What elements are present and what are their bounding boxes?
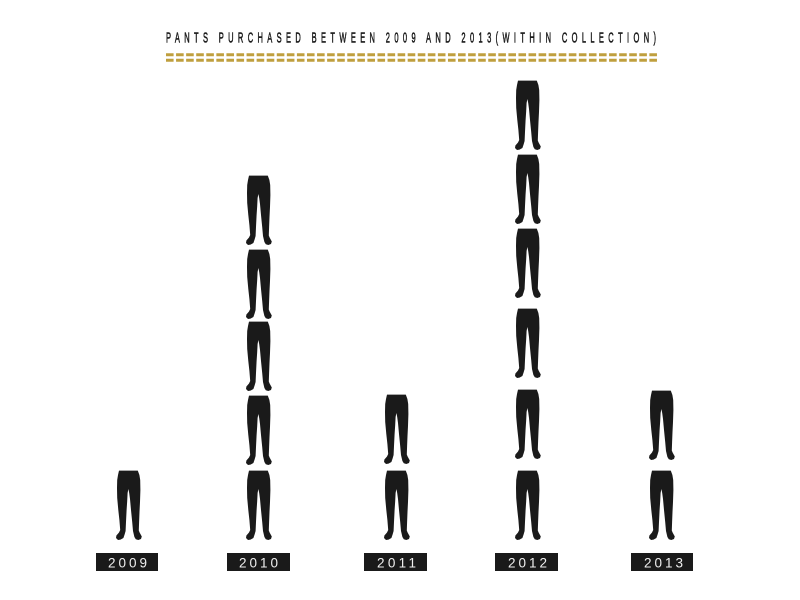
year label 2013 xyxy=(631,553,693,571)
year label 2011: 2011 xyxy=(377,555,416,570)
icon: pants 2012 unit 3 xyxy=(515,309,541,378)
icon: pants 2010 unit 2 xyxy=(246,396,272,465)
icon: pants 2011 unit 1 xyxy=(384,471,410,540)
icon: pants 2010 unit 3 xyxy=(246,322,272,391)
dashed gold title rule xyxy=(166,55,657,60)
icon: pants 2011 unit 2 xyxy=(384,395,410,464)
icon: pants 2009 unit 1 xyxy=(116,471,142,540)
column: 2011 xyxy=(364,395,427,571)
icon: pants 2012 unit 1 xyxy=(515,471,541,540)
icon: pants 2012 unit 6 xyxy=(515,81,541,150)
icon: pants 2012 unit 5 xyxy=(515,155,541,224)
title: PANTS PURCHASED BETWEEN 2009 AND 2013(WITHIN COLLECTION) xyxy=(166,29,656,46)
icon: pants 2010 unit 5 xyxy=(246,176,272,245)
year label 2013: 2013 xyxy=(644,555,683,570)
icon: pants 2013 unit 1 xyxy=(649,471,675,540)
column: 2012 xyxy=(495,81,558,571)
year label 2009: 2009 xyxy=(108,555,147,570)
icon: pants 2010 unit 1 xyxy=(246,471,272,540)
icon: pants 2012 unit 2 xyxy=(515,390,541,459)
column: 2013 xyxy=(631,391,693,571)
year label 2012: 2012 xyxy=(508,555,547,570)
year label 2010: 2010 xyxy=(239,555,278,570)
icon: pants 2012 unit 4 xyxy=(515,229,541,298)
icon: pants 2010 unit 4 xyxy=(246,250,272,319)
year label 2012 xyxy=(495,553,558,571)
year label 2011 xyxy=(364,553,427,571)
year label 2010 xyxy=(227,553,290,571)
column: 2009 xyxy=(96,471,158,571)
column: 2010 xyxy=(227,176,290,571)
icon: pants 2013 unit 2 xyxy=(649,391,675,460)
